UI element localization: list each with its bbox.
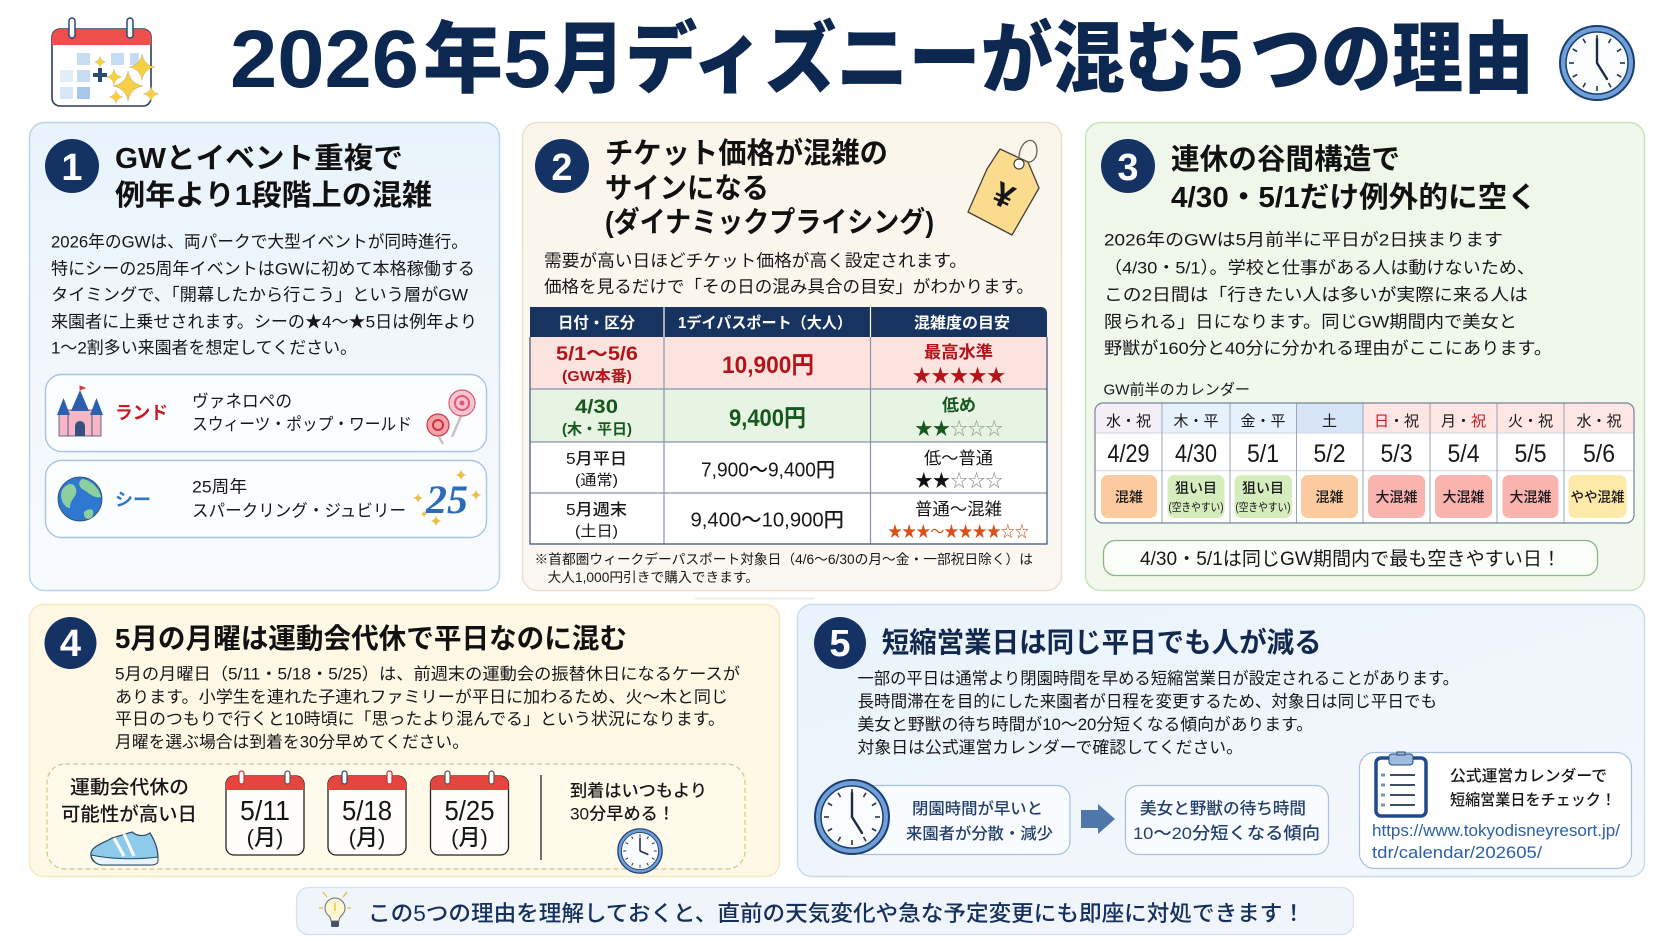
weekday headers: 水・祝 [1106, 413, 1151, 430]
row: May weekdays: ★★☆☆☆ [915, 471, 1003, 491]
Land event name: ヴァネロペの [192, 392, 292, 411]
panel 2 body text [544, 252, 1034, 296]
table header [530, 307, 1047, 337]
number badge 1: 1 [61, 147, 83, 189]
table header: 混雑度の目安 [914, 313, 1010, 332]
row: GW peak: ★★★★★ [912, 366, 1006, 387]
panel 4 body text: 5月の月曜日（5/11・5/18・5/25）は、前週末の運動会の振替休日になるケースが [115, 664, 741, 684]
icon: sneaker [91, 832, 158, 865]
panel 1 heading [115, 142, 432, 212]
weekday headers: 日・祝 [1374, 413, 1419, 430]
weekday headers: 水・祝 [1576, 413, 1622, 430]
calendar: 5/11: 5/11 [240, 795, 290, 826]
panel 3 body text: 限られる」日になります。同じGW期間内で美女と [1104, 312, 1517, 332]
calendar caption: GW前半のカレンダー [1104, 382, 1250, 398]
calendar: 5/25: (月) [451, 825, 488, 850]
panel 3 background [1086, 122, 1644, 590]
icon: calendar with sparkles [52, 18, 159, 106]
panel 2 body text: 価格を見るだけで「その日の混み具合の目安」がわかります。 [544, 278, 1034, 296]
icon: sparkling 25: 25 [425, 477, 468, 522]
panel 4 body text [115, 664, 741, 752]
calendar: 5/11 [226, 771, 304, 855]
row: May weekends: 普通～混雑 [915, 500, 1002, 519]
weekday headers: 木・平 [1173, 413, 1219, 430]
label: sports day substitute [61, 776, 197, 826]
panel 4 body text: 月曜を選ぶ場合は到着を30分早めてください。 [115, 732, 469, 752]
box: early closing [850, 786, 1070, 854]
panel 1 body text [51, 232, 477, 358]
panel 4 body text: あります。小学生を連れた子連れファミリーが平日に加わるため、火～木と同じ [115, 688, 728, 706]
table footnote [534, 551, 1033, 585]
panel 1 body text: タイミングで、「開幕したから行こう」という層がGW [51, 286, 468, 304]
row: GW peak: (GW本番) [562, 368, 632, 385]
dates: 4/29 [1108, 440, 1150, 468]
row: May weekdays: 低～普通 [924, 449, 993, 468]
row: May weekdays: 5月平日 [566, 451, 627, 468]
row: May weekdays: (通常) [575, 472, 618, 489]
calendar: 5/18: 5/18 [342, 795, 392, 826]
crowd status chips: 狙い目 [1242, 480, 1284, 496]
table header: 1デイパスポート（大人） [678, 313, 852, 332]
calendar: 5/25 [430, 771, 508, 855]
crowd status chips: (空きやすい) [1236, 501, 1291, 514]
weekday headers: 火・祝 [1508, 413, 1553, 430]
row: GW peak [530, 337, 1047, 389]
box: shorter waits [1126, 786, 1328, 854]
icon: clipboard [1376, 752, 1426, 816]
calendar prompt: 短縮営業日をチェック！ [1450, 791, 1616, 809]
panel 2 heading [605, 136, 934, 239]
row: 4/30 [530, 389, 1047, 442]
table footnote: 大人1,000円引きで購入できます。 [548, 570, 759, 585]
Sea event name: スパークリング・ジュビリー [192, 502, 406, 520]
icon: stopwatch [618, 829, 662, 873]
title: 5 [1197, 14, 1243, 105]
panel 3 heading: 連休の谷間構造で [1171, 143, 1400, 176]
panel 5 body text [858, 669, 1459, 757]
panel 5 background [798, 604, 1644, 876]
panel 3 body text [1104, 230, 1552, 358]
panel 3 heading: 4/30・5/1だけ例外的に空く [1171, 181, 1537, 214]
panel 1: GW and events [30, 122, 500, 590]
crowd status chips [1101, 475, 1626, 518]
panel 5 body text: 対象日は公式運営カレンダーで確認してください。 [858, 738, 1243, 757]
arrival advice: 30分早める！ [570, 804, 675, 824]
panel 1 heading: GWとイベント重複で [115, 142, 403, 175]
icon: lollipops [427, 390, 475, 444]
number badge 1 [45, 139, 99, 193]
Sea event name [192, 478, 406, 520]
row: 4/30: 低め [942, 396, 976, 415]
box: shorter waits: 美女と野獣の待ち時間 [1140, 799, 1306, 818]
calendar: 5/11: (月) [247, 825, 283, 850]
panel 5 body text: 一部の平日は通常より閉園時間を早める短縮営業日が設定されることがあります。 [858, 669, 1459, 688]
label: sports day substitute: 可能性が高い日 [61, 804, 197, 826]
panel 4 body text: 平日のつもりで行くと10時頃に「思ったより混んでる」という状況になります。 [115, 710, 725, 728]
panel 1 heading: 例年より1段階上の混雑 [115, 179, 432, 212]
panel 2 body text: 需要が高い日ほどチケット価格が高く設定されます。 [544, 252, 967, 270]
row: 4/30: 9,400円 [729, 405, 806, 432]
card: Land [46, 374, 486, 452]
weekday headers: 金・平 [1240, 413, 1286, 430]
callout: emptiest days: 4/30・5/1は同じGW期間内で最も空きやすい日！ [1140, 548, 1561, 570]
weekday headers: 土 [1322, 413, 1337, 430]
box: early closing: 閉園時間が早いと [912, 799, 1043, 818]
panel 1 background [30, 122, 500, 590]
panel 1 body text: 来園者に上乗せされます。シーの★4～★5日は例年より [51, 312, 477, 332]
crowd status chips: やや混雑 [1570, 489, 1624, 505]
number badge 3 [1101, 139, 1155, 193]
dates: 5/1 [1247, 440, 1279, 468]
arrival advice [570, 782, 707, 824]
panel 1 body text: 1～2割多い来園者を想定してください。 [51, 338, 357, 358]
box: shorter waits: 10～20分短くなる傾向 [1133, 824, 1320, 843]
table footnote: ※首都圏ウィークデーパスポート対象日（4/6～6/30の月～金・一部祝日除く）は [534, 551, 1033, 567]
icon: clock [815, 780, 889, 854]
row: May weekdays [530, 442, 1047, 493]
weekday headers: 月・祝 [1441, 413, 1486, 430]
label: Sea: シー [115, 490, 151, 510]
dates: 5/2 [1314, 440, 1346, 468]
panel 3: gap between holidays [1086, 122, 1644, 590]
calendar prompt [1450, 766, 1616, 809]
row: GW peak: 10,900円 [722, 352, 814, 379]
dates: 5/5 [1514, 440, 1546, 468]
card: Sea [46, 460, 486, 538]
dashed box: likely Mondays [47, 764, 745, 873]
panel 5 heading: 短縮営業日は同じ平日でも人が減る [882, 626, 1322, 658]
panel 5 body text: 長時間滞在を目的にした来園者が日程を変更するため、対象日は同じ平日でも [858, 692, 1437, 711]
number badge 4: 4 [60, 623, 81, 665]
row: May weekends [530, 493, 1047, 544]
row: May weekends: 9,400～10,900円 [690, 510, 844, 532]
calendar frame [1095, 403, 1634, 523]
title: つの理由 [1250, 15, 1534, 103]
crowd status chips: (空きやすい) [1168, 501, 1224, 514]
arrow [1081, 804, 1115, 834]
GW calendar table [1095, 403, 1634, 523]
number badge 5: 5 [829, 623, 851, 665]
panel 2 heading: チケット価格が混雑の [605, 136, 888, 170]
panel 2 background [522, 122, 1062, 590]
dates: 4/30 [1175, 440, 1217, 468]
panel 5 body text: 美女と野獣の待ち時間が10～20分短くなる傾向があります。 [858, 715, 1313, 734]
title: 月ディズニーが混む [553, 15, 1197, 103]
dates: 5/3 [1380, 440, 1412, 468]
closing message: この5つの理由を理解しておくと、直前の天気変化や急な予定変更にも即座に対処できます！ [368, 901, 1305, 926]
table header: 日付・区分 [558, 314, 635, 332]
icon: sparkling 25 [413, 470, 482, 526]
icon: price tag [968, 140, 1039, 235]
calendar: 5/18: (月) [349, 825, 385, 850]
panel 3 body text: この2日間は「行きたい人は多いが実際に来る人は [1104, 286, 1528, 304]
icon: castle [57, 386, 103, 436]
calendar: 5/18 [328, 771, 406, 855]
panel 3 body text: 野獣が160分と40分に分かれる理由がここにあります。 [1104, 339, 1552, 358]
crowd status chips: 混雑 [1115, 489, 1143, 505]
price table [530, 307, 1047, 544]
panel 4: Mondays [30, 604, 780, 876]
box: early closing: 来園者が分散・減少 [906, 824, 1053, 843]
title: 5 [503, 14, 551, 105]
URL: https://www.tokyodisneyresort.jp/ [1372, 821, 1620, 840]
icon: light bulb [319, 892, 351, 927]
number badge 4 [44, 617, 96, 669]
Sea event name: 25周年 [192, 478, 247, 496]
crowd status chips: 大混雑 [1442, 489, 1484, 505]
label: sports day substitute: 運動会代休の [70, 776, 189, 798]
dates: 5/4 [1448, 440, 1480, 468]
panel 2: ticket pricing [522, 122, 1062, 590]
label: Land: ランド [115, 403, 168, 423]
panel 3 body text: （4/30・5/1）。学校と仕事がある人は動けないため、 [1104, 258, 1535, 278]
panel 3 body text: 2026年のGWは5月前半に平日が2日挟まります [1104, 230, 1503, 250]
crowd status chips: 大混雑 [1510, 489, 1552, 505]
arrival advice: 到着はいつもより [570, 782, 707, 800]
calendar: 5/25: 5/25 [444, 795, 494, 826]
row: May weekends: ★★★～★★★★☆☆ [888, 523, 1029, 541]
row: 4/30: (木・平日) [562, 421, 632, 438]
icon: globe [58, 477, 102, 521]
dates: 5/6 [1583, 440, 1615, 468]
box: official calendar link [1360, 752, 1632, 868]
bottom message bar [296, 888, 1354, 934]
panel 4 heading: 5月の月曜は運動会代休で平日なのに混む [115, 623, 627, 654]
row: May weekends: 5月週末 [566, 501, 627, 519]
panel 3 heading [1171, 143, 1537, 214]
dates [1108, 440, 1615, 468]
row: 4/30: ★★☆☆☆ [915, 419, 1003, 439]
panel 4 background [30, 604, 780, 876]
row: May weekdays: 7,900～9,400円 [701, 460, 835, 482]
title: 年 [423, 15, 503, 103]
row: GW peak: 5/1～5/6 [556, 344, 638, 365]
panel 2 heading: サインになる [605, 173, 769, 205]
callout: emptiest days [1104, 540, 1598, 576]
Land event name [192, 392, 412, 434]
panel 2 heading: (ダイナミックプライシング) [605, 205, 934, 239]
Land event name: スウィーツ・ポップ・ワールド [192, 415, 412, 434]
number badge 3: 3 [1117, 147, 1139, 189]
icon: title clock [1560, 26, 1634, 100]
calendar prompt: 公式運営カレンダーで [1450, 766, 1607, 785]
icon: price tag: ¥ [987, 175, 1020, 217]
row: GW peak: 最高水準 [924, 342, 993, 362]
number badge 2 [535, 139, 589, 193]
title [230, 14, 1534, 105]
number badge 2: 2 [551, 147, 573, 189]
URL: tdr/calendar/202605/ [1372, 843, 1542, 862]
weekday headers [1095, 403, 1634, 433]
panel 1 body text: 特にシーの25周年イベントはGWに初めて本格稼働する [51, 260, 475, 278]
row: May weekends: (土日) [575, 523, 618, 540]
panel 1 body text: 2026年のGWは、両パークで大型イベントが同時進行。 [51, 232, 468, 252]
crowd status chips: 混雑 [1316, 489, 1344, 505]
number badge 5 [814, 617, 866, 669]
row: 4/30: 4/30 [575, 397, 618, 418]
title: 2026 [230, 14, 419, 105]
crowd status chips: 大混雑 [1376, 489, 1418, 505]
URL [1372, 821, 1620, 862]
panel 5: shortened hours [798, 604, 1644, 876]
crowd status chips: 狙い目 [1175, 480, 1217, 496]
